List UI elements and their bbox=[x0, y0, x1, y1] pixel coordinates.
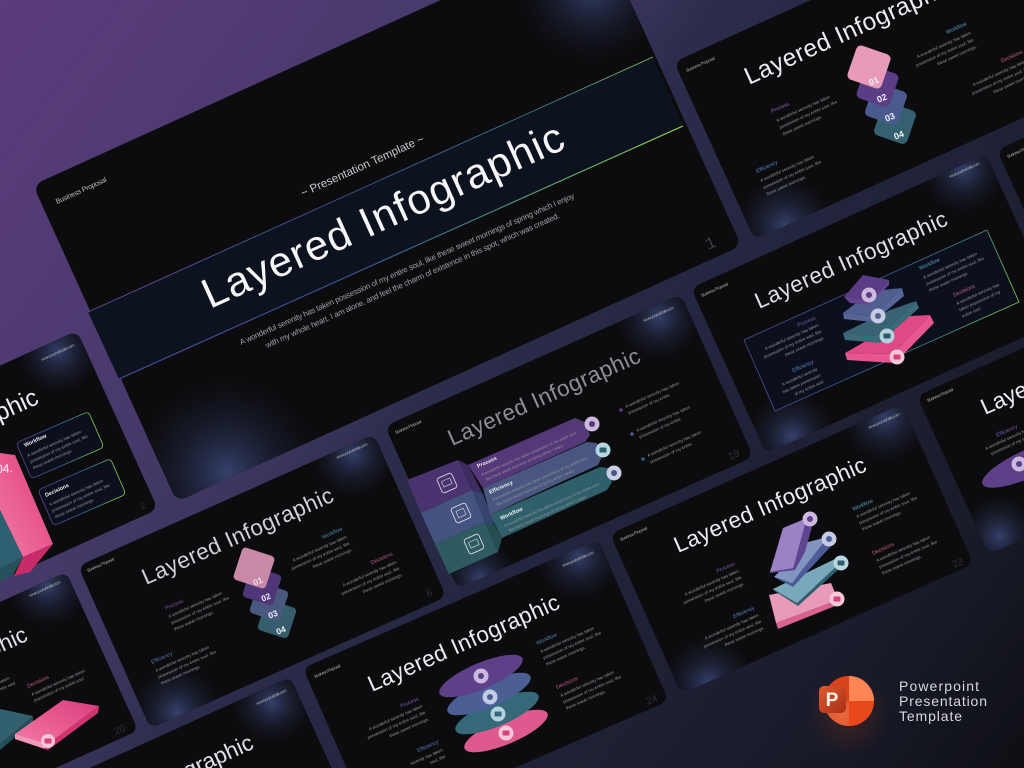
slide 2 glow bbox=[24, 334, 90, 386]
logo lower right quadrant bbox=[849, 701, 874, 726]
main title: Layered Infographic bbox=[194, 113, 571, 317]
logo disc bbox=[824, 676, 874, 726]
slide 2 workflow box bbox=[16, 411, 104, 479]
slide 19 glow bottom bbox=[451, 552, 510, 586]
teal layer side bbox=[773, 565, 840, 606]
decisions text: A wonderful serenity has taken bbox=[559, 669, 615, 698]
efficiency text: A wonderful serenity has taken bbox=[154, 644, 210, 673]
pink ellipse bbox=[459, 701, 553, 761]
teal plate side bbox=[843, 301, 919, 343]
purple layer side bbox=[770, 518, 813, 573]
efficiency text: A wonderful serenity bbox=[781, 366, 819, 387]
3D box graphic bbox=[0, 453, 53, 582]
panel: slide 2 top left bbox=[0, 334, 155, 582]
pink layer bbox=[769, 583, 840, 629]
far right efficiency heading: Efficiency bbox=[995, 424, 1019, 439]
efficiency heading: Efficiency bbox=[755, 160, 779, 175]
decisions heading: Decisions bbox=[952, 284, 976, 299]
top right business label: Business Proposal bbox=[685, 56, 716, 73]
subtitle: ~ Presentation Template ~ bbox=[299, 133, 427, 200]
slide 2 decisions box bbox=[38, 458, 126, 526]
purple plate side bbox=[844, 280, 889, 305]
workflow box text: possession of my entire soul, like bbox=[29, 433, 89, 464]
panel: slide framed plates bbox=[694, 157, 1024, 451]
bottom slide website: www.yourwebsite.com bbox=[255, 688, 288, 706]
panel: slide 23 folded layers bbox=[612, 407, 970, 691]
box dark pink side bbox=[14, 544, 53, 576]
pink plate side bbox=[845, 315, 934, 363]
bullet text 2: possession of my entire bbox=[638, 416, 682, 439]
process ribbon text: like these sweet mornings of spring which I enjoy bbox=[485, 443, 564, 482]
card numbers bbox=[252, 575, 287, 637]
card numbers: 04 bbox=[275, 624, 287, 637]
slide 6 glow top bbox=[318, 437, 387, 490]
slide 20 card bbox=[0, 575, 136, 768]
ribbon circles bbox=[584, 416, 622, 480]
top right slide glow bbox=[744, 184, 823, 236]
icon: powerpoint logo bbox=[807, 673, 891, 757]
slide 19 website: www.yourwebsite.com bbox=[642, 305, 675, 323]
slide 23 glow bottom bbox=[672, 644, 744, 691]
pink layer top bbox=[769, 583, 838, 623]
card numbers bbox=[867, 75, 905, 142]
slide 6 title: Layered Infographic bbox=[138, 483, 337, 590]
bottom slide card bbox=[90, 680, 332, 768]
efficiency text: possession of my entire soul, like bbox=[762, 159, 822, 190]
workflow ribbon text: Workflow bbox=[499, 506, 525, 522]
panel: slide far right top bbox=[997, 17, 1024, 310]
process heading: Process bbox=[770, 101, 791, 115]
card 01 bbox=[233, 547, 275, 589]
teal plate bbox=[843, 301, 919, 343]
card 03 bbox=[249, 582, 289, 622]
fold strip teal bbox=[485, 522, 502, 552]
ribbon blue bbox=[483, 442, 602, 515]
card 04 bbox=[873, 101, 917, 145]
decisions text: these sweet mornings. bbox=[565, 689, 606, 711]
panel: slide top right stacked cards bbox=[676, 0, 1024, 237]
slide 24 number: 24 bbox=[645, 693, 660, 708]
panel: slide 20 left bbox=[0, 574, 136, 768]
workflow heading: Workflow bbox=[918, 257, 941, 272]
slide 24 website: www.yourwebsite.com bbox=[561, 550, 595, 568]
workflow box text: these sweet mornings. bbox=[32, 448, 73, 470]
main slide glow top bbox=[532, 0, 640, 48]
far right bottom glow bbox=[972, 502, 1024, 552]
plate stack bbox=[843, 275, 934, 364]
slide 23 title: Layered Infographic bbox=[670, 452, 870, 558]
logo P tile bbox=[819, 686, 846, 713]
efficiency heading: Efficiency bbox=[416, 739, 440, 754]
decisions box text: possession of my entire soul, like bbox=[51, 482, 111, 513]
workflow heading: Workflow bbox=[535, 632, 558, 647]
slide 20 glow bbox=[14, 574, 78, 620]
process text: possession of my entire soul, like bbox=[170, 595, 230, 625]
icon circles bbox=[474, 668, 514, 740]
decisions box frame bbox=[38, 458, 126, 526]
pink plate icon bbox=[41, 734, 55, 748]
slide 2 card bbox=[0, 331, 158, 652]
far right bottom business label: Business Proposal bbox=[926, 387, 954, 403]
blue layer top bbox=[774, 537, 828, 583]
bullet text 3: possession of my entire bbox=[649, 441, 693, 464]
framed slide card bbox=[691, 154, 1024, 454]
teal plate side bbox=[0, 716, 33, 750]
slide 20 decisions heading: Decisions bbox=[26, 675, 50, 690]
decisions heading: Decisions bbox=[555, 676, 579, 691]
process text: these sweet mornings. bbox=[782, 114, 823, 137]
purple ellipse bbox=[434, 646, 528, 706]
slide 6 card bbox=[78, 434, 446, 729]
workflow text: possession of my entire soul, like bbox=[291, 540, 351, 571]
plate icons bbox=[862, 288, 904, 364]
box pink face bbox=[0, 453, 53, 557]
efficiency ribbon text: like these sweet mornings of spring which I enjoy bbox=[496, 468, 575, 507]
blue layer side bbox=[774, 537, 833, 587]
workflow box text: A wonderful serenity has taken bbox=[26, 429, 82, 458]
slide 20 website: www.yourwebsite.com bbox=[28, 579, 62, 598]
efficiency text: possession of my entire soul, like bbox=[157, 649, 217, 679]
blue ellipse bbox=[442, 664, 536, 724]
ribbon purple bbox=[468, 418, 590, 488]
framed slide glow top bbox=[929, 157, 997, 206]
main slide card bbox=[33, 0, 741, 502]
card 04 bbox=[257, 599, 297, 639]
process ribbon text: Process bbox=[476, 456, 498, 470]
efficiency heading: Efficiency bbox=[150, 651, 174, 666]
slide 6 number: 6 bbox=[425, 587, 435, 600]
band fill bbox=[88, 57, 683, 379]
workflow box heading: Workflow bbox=[23, 433, 49, 449]
panel: main title slide bbox=[36, 0, 738, 499]
bullet list bbox=[619, 380, 705, 464]
slide 24 glow bbox=[544, 542, 612, 592]
band bottom line bbox=[119, 126, 683, 379]
teal plate top bbox=[0, 709, 33, 744]
workflow text: A wonderful serenity has taken bbox=[922, 251, 978, 280]
workflow text: possession of my entire soul, like bbox=[915, 37, 975, 68]
far right slide card bbox=[997, 17, 1024, 310]
decisions text: possession of my entire soul, like bbox=[341, 565, 401, 596]
slide 6 business label: Business Proposal bbox=[86, 557, 115, 573]
decisions text: possession of my entire soul, like bbox=[562, 674, 622, 704]
top right slide card bbox=[674, 0, 1024, 240]
icon: screen bbox=[436, 472, 458, 494]
purple layer top bbox=[770, 518, 807, 572]
card numbers: 01 bbox=[252, 575, 264, 588]
workflow text: A wonderful serenity has taken bbox=[916, 30, 972, 59]
efficiency text: these sweet mornings. bbox=[766, 174, 807, 197]
product caption bbox=[899, 678, 987, 724]
slide 2 number: 2 bbox=[139, 500, 149, 513]
efficiency text: these sweet mornings. bbox=[160, 664, 201, 686]
slide number: 1 bbox=[703, 234, 720, 255]
framed slide glow bottom bbox=[756, 400, 828, 451]
teal plate top bbox=[843, 301, 916, 336]
efficiency heading: Efficiency bbox=[732, 605, 756, 620]
body line 2: with my whole heart. I am alone, and feel the charm of existence in this spot, which was created. bbox=[263, 211, 561, 350]
box dark teal side bbox=[0, 557, 23, 582]
decisions text: A wonderful serenity has bbox=[955, 282, 1000, 306]
framed slide title: Layered Infographic bbox=[751, 206, 951, 314]
framed slide business label: Business Proposal bbox=[700, 281, 729, 298]
workflow text: these sweet mornings. bbox=[861, 510, 902, 532]
slide 24 title: Layered Infographic bbox=[364, 590, 563, 697]
logo light quadrant bbox=[849, 676, 874, 701]
decisions heading: Decisions bbox=[871, 542, 895, 557]
process heading: Process bbox=[400, 696, 420, 710]
slide 23 number: 23 bbox=[951, 556, 966, 571]
ellipse stack bbox=[434, 646, 553, 761]
main slide glow bottom bbox=[154, 395, 299, 498]
slide 2 website: www.yourwebsite.com bbox=[40, 342, 76, 362]
decisions text: these sweet mornings. bbox=[881, 554, 922, 576]
process text: possession of my entire soul, like bbox=[367, 709, 427, 740]
process text: possession of my entire soul, like bbox=[763, 328, 823, 359]
efficiency text: serenity has taken bbox=[410, 747, 444, 766]
workflow heading: Workflow bbox=[945, 21, 968, 36]
process text: these sweet mornings. bbox=[704, 581, 745, 603]
decisions text: these sweet mornings. bbox=[362, 572, 403, 594]
workflow text: possession of my entire soul, like bbox=[542, 630, 602, 660]
efficiency ribbon text: Efficiency bbox=[488, 480, 514, 496]
card numbers: 03 bbox=[883, 111, 896, 124]
far right icon circle bbox=[1012, 456, 1024, 472]
process heading: Process bbox=[164, 598, 185, 612]
bullet text 2: A wonderful serenity has taken bbox=[635, 404, 691, 433]
workflow text: A wonderful serenity has taken bbox=[292, 534, 348, 563]
slide 19 card bbox=[385, 294, 753, 589]
card 02 bbox=[855, 64, 900, 108]
decisions box text: A wonderful serenity has taken bbox=[48, 478, 104, 507]
left panel teal bbox=[435, 522, 498, 574]
panel: slide bottom partial bbox=[90, 680, 332, 768]
main body text bbox=[238, 191, 576, 350]
process text: A wonderful serenity has taken bbox=[764, 322, 820, 351]
decisions box text: these sweet mornings. bbox=[54, 497, 95, 519]
slide 19 title: Layered Infographic bbox=[444, 343, 644, 451]
process text: possession of my entire soul, like bbox=[683, 574, 743, 605]
decisions text: entire soul bbox=[961, 306, 981, 319]
slide 19 glow top bbox=[624, 297, 694, 352]
workflow text: A wonderful serenity has taken bbox=[855, 490, 911, 519]
slide 23 card bbox=[610, 404, 974, 694]
workflow text: these sweet mornings. bbox=[545, 645, 586, 667]
blue plate bbox=[843, 288, 904, 322]
purple layer bbox=[770, 518, 813, 573]
left panel blue bbox=[421, 490, 485, 544]
blue plate side bbox=[843, 288, 904, 322]
efficiency heading: Efficiency bbox=[791, 359, 815, 374]
fold strip blue bbox=[472, 490, 494, 524]
decisions box heading: Decisions bbox=[44, 483, 70, 499]
workflow text: these sweet mornings. bbox=[936, 44, 978, 66]
workflow ribbon text: like these sweet mornings of spring which I enjoy bbox=[508, 494, 587, 533]
bottom slide glow bbox=[238, 680, 305, 736]
efficiency text: soul, like bbox=[429, 753, 447, 765]
pink plate bbox=[15, 700, 99, 750]
band top line bbox=[88, 57, 653, 312]
ribbon teal bbox=[490, 467, 612, 538]
teal ellipse bbox=[450, 683, 544, 743]
slide 19 business label: Business Proposal bbox=[394, 419, 422, 435]
efficiency text: A wonderful serenity has taken bbox=[759, 154, 815, 183]
slide 6 website: www.yourwebsite.com bbox=[335, 441, 369, 460]
process text: A wonderful serenity has taken bbox=[684, 568, 740, 597]
panel: slide far right bottom bbox=[920, 348, 1024, 552]
framed slide website: www.yourwebsite.com bbox=[948, 161, 981, 179]
process text last line: these sweet mornings. bbox=[389, 716, 430, 738]
business label: Business Proposal bbox=[55, 177, 108, 206]
card numbers: 02 bbox=[260, 591, 272, 604]
efficiency text: these sweet mornings. bbox=[724, 625, 765, 647]
slide 20 decisions text: possession of my entire soul bbox=[33, 676, 85, 703]
workflow text: A wonderful serenity has taken bbox=[539, 625, 595, 654]
bullet text 1: A wonderful serenity has taken bbox=[624, 380, 680, 409]
process heading: Process bbox=[716, 561, 736, 575]
slide 23 website: www.yourwebsite.com bbox=[867, 411, 901, 430]
card numbers: 01 bbox=[867, 75, 880, 88]
process text: A wonderful serenity has taken bbox=[167, 590, 223, 619]
pink plate top bbox=[845, 315, 930, 354]
icon: laptop bbox=[463, 533, 485, 555]
panel icons bbox=[436, 472, 485, 555]
pink plate top bbox=[15, 700, 99, 744]
decisions text: possession of my entire soul, like bbox=[878, 539, 938, 569]
decisions heading: Decisions bbox=[1000, 49, 1024, 64]
workflow text: these sweet mornings. bbox=[312, 547, 353, 569]
slide 19 number: 19 bbox=[727, 448, 742, 463]
decisions text: A wonderful serenity has taken bbox=[342, 559, 398, 588]
process text: these sweet mornings. bbox=[173, 610, 214, 632]
efficiency text: has taken possession bbox=[782, 372, 822, 394]
panel: slide 19 ribbons bbox=[388, 297, 750, 586]
pink plate light edge bbox=[15, 734, 45, 749]
body line 1: A wonderful serenity has taken possession of my entire soul, like these sweet mornings of spring which I enjoy bbox=[238, 191, 576, 347]
workflow heading: Workflow bbox=[321, 526, 344, 541]
logo P letter: P bbox=[826, 690, 839, 711]
process ribbon text: A wonderful serenity has taken possession of my entire soul, bbox=[480, 430, 578, 477]
workflow text: possession of my entire soul, like bbox=[858, 495, 918, 525]
workflow ribbon text: A wonderful serenity has taken possession of my entire soul, bbox=[503, 481, 601, 528]
decisions heading: Decisions bbox=[370, 551, 394, 566]
efficiency text: of my entire soul bbox=[793, 379, 824, 397]
inner frame bbox=[744, 230, 1019, 411]
caption line 2: Presentation bbox=[899, 693, 987, 709]
process heading: Process bbox=[797, 315, 817, 329]
fold strip purple bbox=[458, 460, 483, 494]
card numbers: 04 bbox=[892, 129, 905, 142]
pink plate bbox=[845, 315, 934, 363]
pink layer side bbox=[776, 600, 840, 629]
slide 6 glow bottom bbox=[140, 673, 214, 726]
panel: slide 6 stacked cards bbox=[80, 437, 444, 726]
panel: slide 24 ellipses bbox=[306, 542, 666, 768]
caption line 1: Powerpoint bbox=[899, 678, 979, 694]
title band bbox=[88, 57, 683, 379]
pink plate side bbox=[15, 706, 99, 750]
bullet text 3: A wonderful serenity has taken bbox=[646, 429, 702, 458]
decisions text: taken possession of my bbox=[958, 289, 1002, 312]
teal layer top bbox=[773, 559, 838, 603]
efficiency text: A wonderful serenity has taken bbox=[704, 612, 760, 641]
process text: possession of my entire soul, like bbox=[778, 99, 838, 130]
box teal face bbox=[0, 510, 23, 582]
workflow text: possession of my entire soul, like bbox=[925, 255, 985, 286]
caption line 3: Template bbox=[899, 708, 962, 724]
teal plate bbox=[0, 709, 33, 750]
purple plate bbox=[844, 275, 889, 305]
workflow heading: Workflow bbox=[851, 498, 874, 513]
process text: these sweet mornings. bbox=[784, 335, 825, 357]
slide 24 card bbox=[306, 542, 666, 768]
slide 23 glow top bbox=[850, 406, 917, 456]
blue layer bbox=[774, 537, 833, 587]
teal layer bbox=[773, 559, 840, 606]
slide 24 business label: Business Proposal bbox=[313, 663, 341, 679]
process text: A wonderful serenity has taken bbox=[775, 94, 831, 123]
workflow box frame bbox=[16, 411, 104, 479]
decisions text: A wonderful serenity has taken bbox=[875, 534, 931, 563]
slide 23 business label: Business Proposal bbox=[619, 526, 648, 542]
far right purple ellipse bbox=[977, 429, 1024, 497]
bullet dots bbox=[619, 408, 645, 461]
card numbers: 02 bbox=[875, 92, 888, 105]
blue plate top bbox=[843, 288, 902, 316]
far right bottom card bbox=[917, 263, 1024, 554]
workflow text: these sweet mornings. bbox=[928, 270, 969, 293]
efficiency text: possession of my entire soul, like bbox=[703, 618, 763, 649]
slide 20 number: 20 bbox=[113, 723, 128, 738]
layer icons bbox=[802, 512, 848, 606]
folded layers graphic bbox=[769, 512, 848, 629]
logo upper left quadrant bbox=[824, 676, 849, 701]
card 03 bbox=[864, 82, 908, 126]
bullet text 1: possession of my entire bbox=[627, 392, 671, 415]
icon: coin bbox=[450, 502, 472, 524]
slide 20 decisions text: A wonderful serenity has taken bbox=[30, 668, 86, 697]
card numbers: 03 bbox=[267, 608, 279, 621]
left panel purple bbox=[407, 460, 472, 513]
process text: A wonderful serenity has taken bbox=[368, 703, 424, 732]
card 02 bbox=[242, 566, 282, 606]
logo glow bbox=[807, 673, 891, 757]
efficiency ribbon text: A wonderful serenity has taken possession of my entire soul, bbox=[491, 455, 589, 502]
card 01 bbox=[846, 44, 892, 90]
purple plate top bbox=[844, 275, 889, 300]
